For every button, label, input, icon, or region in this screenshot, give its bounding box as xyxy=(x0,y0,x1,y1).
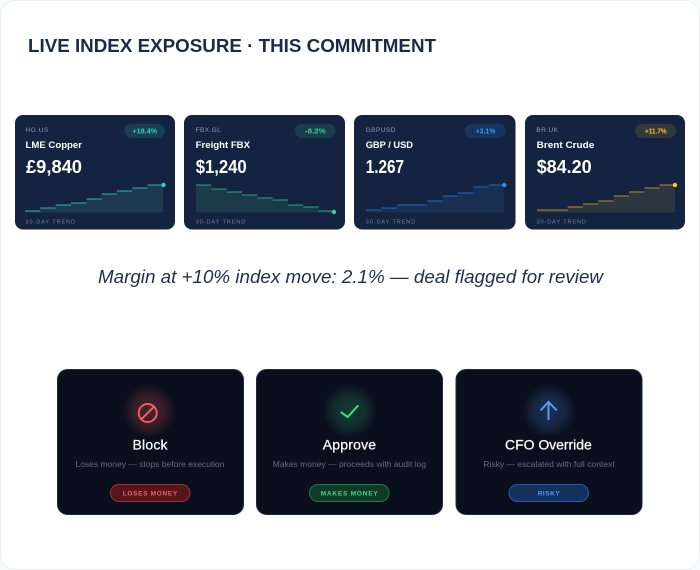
description: Makes money — proceeds with audit log xyxy=(273,459,426,469)
panel: Approve xyxy=(256,370,442,514)
panel: Brent Crude xyxy=(525,115,685,230)
change badge: +11.7% xyxy=(645,126,667,136)
change badge xyxy=(635,124,676,138)
price: £9,840 xyxy=(26,157,82,177)
sparkline xyxy=(537,183,677,212)
trend label: 30-DAY TREND xyxy=(196,220,245,226)
heading: Approve xyxy=(323,436,376,452)
tag: RISKY xyxy=(538,490,560,498)
change badge: +3.1% xyxy=(476,126,496,136)
change badge: +18.4% xyxy=(132,126,157,136)
icon: check xyxy=(323,384,377,438)
change badge: -8.2% xyxy=(305,126,326,136)
tag xyxy=(509,484,588,502)
change badge xyxy=(124,124,165,138)
trend label: 30-DAY TREND xyxy=(26,220,75,226)
icon: block xyxy=(122,384,176,438)
panel: Freight FBX xyxy=(184,115,345,230)
panel: Block xyxy=(58,370,244,514)
change badge xyxy=(295,124,336,138)
name: LME Copper xyxy=(26,140,82,151)
name: GBP / USD xyxy=(366,140,413,151)
name: Brent Crude xyxy=(537,140,594,151)
tag xyxy=(310,484,389,502)
ticker: HG.US xyxy=(26,127,49,134)
trend label: 30-DAY TREND xyxy=(366,220,415,226)
description: Risky — escalated with full context xyxy=(483,459,615,469)
price: 1.267 xyxy=(366,157,404,177)
heading: CFO Override xyxy=(505,436,592,452)
ticker: BR.UK xyxy=(536,127,559,134)
tag xyxy=(110,484,190,502)
tag: MAKES MONEY xyxy=(321,490,378,498)
margin callout: Margin at +10% index move: 2.1% — deal flagged for review xyxy=(98,267,604,287)
price: $84.20 xyxy=(537,157,592,177)
tag: LOSES MONEY xyxy=(123,490,178,498)
trend label: 30-DAY TREND xyxy=(536,220,586,226)
sparkline xyxy=(196,185,336,214)
panel: CFO Override xyxy=(456,370,642,514)
heading: Block xyxy=(132,436,168,452)
sparkline xyxy=(366,183,506,212)
title: LIVE INDEX EXPOSURE · THIS COMMITMENT xyxy=(28,36,436,56)
sparkline xyxy=(25,183,166,212)
panel: GBP / USD xyxy=(354,115,516,230)
ticker: GBPUSD xyxy=(366,127,396,134)
name: Freight FBX xyxy=(196,140,251,151)
icon: up arrow xyxy=(522,384,576,438)
price: $1,240 xyxy=(196,157,247,177)
description: Loses money — stops before execution xyxy=(76,459,225,469)
panel: LME Copper xyxy=(15,115,175,230)
ticker: FBX.GL xyxy=(196,127,221,134)
change badge xyxy=(465,124,506,138)
